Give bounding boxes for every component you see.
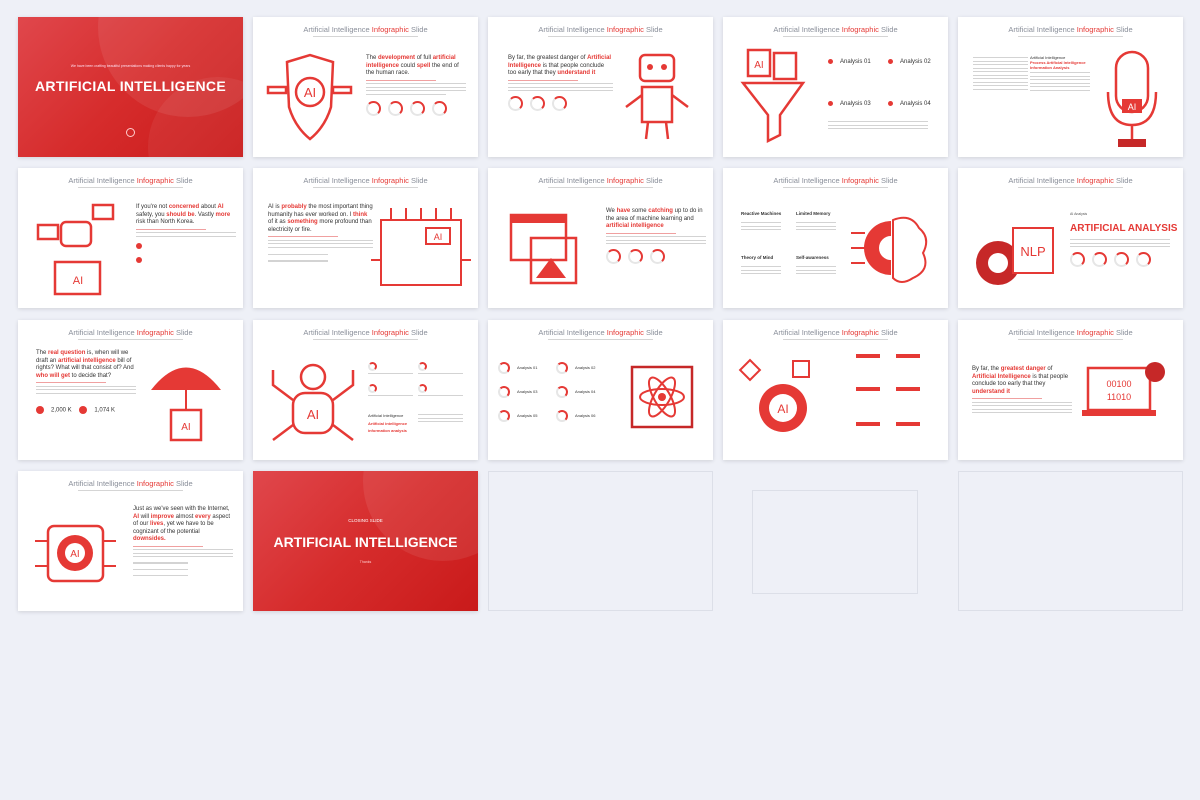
icon: spider robot xyxy=(272,364,354,441)
slide 1: title cover: We have been crafting beautiful presentations making clients happy for years xyxy=(71,64,190,68)
icon: microphone: AI xyxy=(1128,102,1136,112)
slide 2: shield xyxy=(253,17,478,157)
slide 17: closing: ARTIFICIAL INTELLIGENCE xyxy=(273,534,458,550)
slide 16: gear chip: Artificial Intelligence Infographic Slide xyxy=(68,479,193,488)
empty placeholder 1 xyxy=(488,471,713,611)
icon: gear brain xyxy=(851,216,928,283)
slide 12: spider robot: Artificial intelligence information analysis xyxy=(368,420,407,433)
slide 15: laptop: By far, the greatest danger of Artificial Intelligence is that people conclude too early that they understand it xyxy=(972,366,1068,394)
slide 6: robot at laptop xyxy=(18,168,243,308)
icon: laptop binary: 11010 xyxy=(1107,392,1131,402)
slide 14: gear: Artificial Intelligence Infographic Slide xyxy=(773,328,898,337)
icon: shield xyxy=(266,54,352,141)
slide 4: funnel: Analysis 04 xyxy=(900,101,931,107)
slide 3: robot xyxy=(488,17,713,157)
slide 9: brain gear: Theory of Mind xyxy=(741,255,773,260)
slide 4: funnel xyxy=(723,17,948,157)
slide 8: windows: Artificial Intelligence Infographic Slide xyxy=(538,176,663,185)
icon: funnel: AI xyxy=(754,60,764,71)
slide 16: gear chip: Just as we've seen with the Internet, AI will improve almost every aspect of our lives, yet we have to be cognizant of the potential downsides. xyxy=(133,506,230,542)
slide 12: spider robot: Artificial Intelligence Infographic Slide xyxy=(303,328,428,337)
icon: funnel xyxy=(740,48,806,143)
slide 15: laptop: Artificial Intelligence Infographic Slide xyxy=(1008,328,1133,337)
slide 9: brain gear: Artificial Intelligence Infographic Slide xyxy=(773,176,898,185)
slide 10: NLP xyxy=(958,168,1183,308)
slide 1: title cover xyxy=(18,17,243,157)
icon: robot laptop: AI xyxy=(73,275,83,287)
slide 16: gear chip xyxy=(18,471,243,611)
icon: AI gear: AI xyxy=(777,402,789,416)
slide 13: atom chip: Analysis 03 xyxy=(517,389,537,394)
slide 12: spider robot xyxy=(253,320,478,460)
icon: spider robot: AI xyxy=(307,407,319,422)
slide 11: umbrella xyxy=(18,320,243,460)
slide 2: shield: The development of full artificial intelligence could spell the end of the human race. xyxy=(366,55,459,76)
slide 11: umbrella: 2,000 K 1,074 K xyxy=(51,408,115,414)
slide 6: robot at laptop: If you're not concerned about AI safety, you should be. Vastly more risk than North Korea. xyxy=(136,204,230,225)
icon: NLP gear chip: NLP xyxy=(1020,244,1046,259)
icon: laptop binary: 00100 xyxy=(1106,379,1132,389)
slide 15: laptop xyxy=(958,320,1183,460)
slide 13: atom chip: Analysis 05 xyxy=(517,413,537,418)
icon: shield: AI xyxy=(304,85,316,100)
slide 13: atom chip xyxy=(488,320,713,460)
slide 1: title cover: ARTIFICIAL INTELLIGENCE xyxy=(35,78,226,94)
slide 4: funnel: Analysis 01 xyxy=(840,59,871,65)
slide 7: chip: AI is probably the most important thing humanity has ever worked on. I think of it as something more profound than electricity or fire. xyxy=(268,204,373,232)
icon: robot xyxy=(625,54,689,140)
slide 11: umbrella: The real question is, when will we draft an artificial intelligence bill of rights? What will that consist of? And who will get to decide that? xyxy=(36,350,134,378)
slide 4: funnel: Artificial Intelligence Infographic Slide xyxy=(773,25,898,34)
slide 4: funnel: Analysis 03 xyxy=(840,101,871,107)
icon: umbrella chip: AI xyxy=(181,422,191,433)
icon: robot laptop xyxy=(36,204,114,296)
slide 8: windows: We have some catching up to do in the area of machine learning and artificial intelligence xyxy=(606,208,703,229)
slide 3: robot: By far, the greatest danger of Artificial Intelligence is that people conclude too early that they understand it xyxy=(508,55,611,76)
icon: umbrella chip xyxy=(151,368,221,442)
slide 13: atom chip: Analysis 01 xyxy=(517,365,537,370)
icon: NLP gear chip xyxy=(976,227,1054,285)
slide 5: microphone: Process Artificial Intelligence Information Analysis xyxy=(1030,60,1086,70)
slide 13: atom chip: Analysis 06 xyxy=(575,413,595,418)
slide 2: shield: Artificial Intelligence Infographic Slide xyxy=(303,25,428,34)
empty placeholder 3 xyxy=(958,471,1183,611)
slide 10: NLP: Artificial Intelligence Infographic Slide xyxy=(1008,176,1133,185)
slide 3: robot: Artificial Intelligence Infographic Slide xyxy=(538,25,663,34)
icon: AI gear xyxy=(738,358,810,432)
icon: atom chip xyxy=(630,366,694,428)
icon: circuit chip: AI xyxy=(434,232,442,242)
slide 17: closing xyxy=(253,471,478,611)
slide 9: brain gear: Limited Memory xyxy=(796,211,831,216)
icon: laptop binary xyxy=(1082,362,1165,416)
slide 5: microphone: Artificial Intelligence xyxy=(1030,55,1065,60)
slide 9: brain gear: Self-awareness xyxy=(796,255,829,260)
slide 17: closing: CLOSING SLIDE xyxy=(348,518,383,523)
slide 17: closing: Thanks xyxy=(360,560,371,564)
slide 9: brain gear: Reactive Machines xyxy=(741,211,781,216)
slide 6: robot at laptop: Artificial Intelligence Infographic Slide xyxy=(68,176,193,185)
slide 7: chip xyxy=(253,168,478,308)
icon: microphone xyxy=(1106,50,1158,147)
slide 13: atom chip: Analysis 02 xyxy=(575,365,595,370)
empty placeholder 2 xyxy=(752,490,918,594)
slide 10: NLP: ARTIFICIAL ANALYSIS xyxy=(1070,223,1177,234)
slide 9: brain gear xyxy=(723,168,948,308)
slide 5: microphone xyxy=(958,17,1183,157)
slide 14: gear xyxy=(723,320,948,460)
slide 5: microphone: Artificial Intelligence Infographic Slide xyxy=(1008,25,1133,34)
slide 7: chip: Artificial Intelligence Infographic Slide xyxy=(303,176,428,185)
slide 13: atom chip: Artificial Intelligence Infographic Slide xyxy=(538,328,663,337)
icon: browser windows xyxy=(510,214,578,284)
slide 10: NLP: AI Analysis xyxy=(1070,212,1087,216)
slide 8: windows xyxy=(488,168,713,308)
slide 4: funnel: Analysis 02 xyxy=(900,59,931,65)
slide 13: atom chip: Analysis 04 xyxy=(575,389,595,394)
icon: gear chip xyxy=(35,524,116,582)
slide 11: umbrella: Artificial Intelligence Infographic Slide xyxy=(68,328,193,337)
icon: gear chip: AI xyxy=(70,549,80,560)
slide 12: spider robot: Artificial Intelligence xyxy=(368,413,403,418)
icon: circuit chip xyxy=(371,208,471,286)
